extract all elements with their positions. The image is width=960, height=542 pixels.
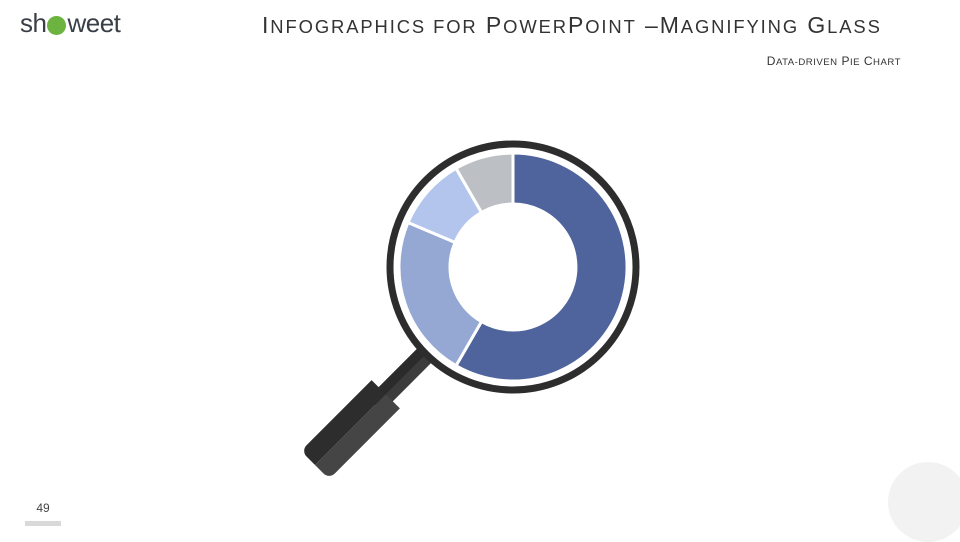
page number: 49 [36,501,50,515]
lens ring [390,144,636,390]
page number [25,495,61,526]
watermark logo [888,462,960,542]
logo: sh weet [20,8,120,38]
donut segments [399,153,627,381]
title: INFOGRAPHICS FOR POWERPOINT –MAGNIFYING GLASS [262,12,882,38]
subtitle: DATA-DRIVEN PIE CHART [767,54,901,68]
handle [301,338,442,479]
